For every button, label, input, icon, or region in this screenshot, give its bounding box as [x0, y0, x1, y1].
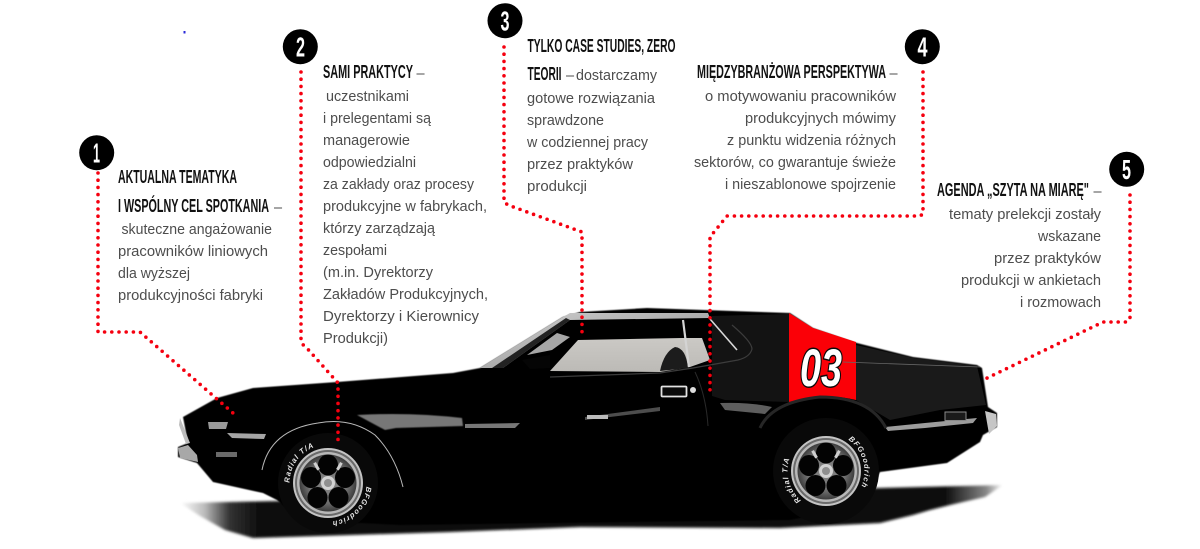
heading 2 [323, 61, 426, 82]
heading 5 [937, 179, 1102, 200]
body 3: produkcji [527, 179, 587, 195]
body 4: z punktu widzenia różnych [727, 133, 896, 149]
heading 1 [118, 166, 283, 216]
B pillar [683, 320, 689, 367]
body 4: i nieszablonowe spojrzenie [725, 177, 896, 193]
body 2: zespołami [323, 243, 387, 259]
text block 4 [694, 61, 898, 193]
body 4: sektorów, co gwarantuje świeże [694, 155, 896, 171]
rear wheel [774, 418, 879, 524]
body 4 [694, 89, 897, 193]
front wheel [278, 433, 378, 526]
body 3: gotowe rozwiązania [527, 91, 656, 107]
heading 2: – [416, 66, 426, 82]
heading 3: TEORII [528, 63, 562, 84]
body 1: pracowników liniowych [118, 244, 268, 260]
body 2: uczestnikami [326, 89, 409, 105]
body 4: produkcyjnych mówimy [745, 111, 897, 127]
body 5 [949, 207, 1102, 311]
heading 3 [528, 35, 676, 84]
rear lights and bumper [945, 411, 997, 434]
trunk sheen [856, 345, 986, 420]
front wheel: Radial T/A [284, 443, 314, 483]
heading 4 [697, 61, 898, 82]
race number 03: 03 [800, 339, 842, 398]
seat [660, 347, 688, 371]
rear quarter chrome [710, 319, 737, 350]
body 2 [323, 89, 488, 347]
rear wheel arch [760, 397, 886, 428]
body 2: i prelegentami są [323, 111, 432, 127]
body 2: managerowie [323, 133, 410, 149]
badge 2 [283, 29, 318, 64]
body 5: wskazane [1037, 229, 1101, 245]
door handle [662, 386, 696, 396]
text block 3 [526, 35, 676, 195]
badge 1: 1 [93, 138, 100, 168]
door seam [695, 372, 708, 426]
text block 1 [118, 166, 283, 304]
vent window [527, 333, 570, 355]
badge 1 [79, 135, 114, 170]
body 4: o motywowaniu pracowników [705, 89, 897, 105]
rear wheel: Radial T/A [782, 458, 801, 504]
side window [550, 338, 710, 372]
dotted connector 4 [710, 72, 923, 395]
badge 5 [1109, 152, 1144, 187]
body 3: w codziennej pracy [526, 135, 649, 151]
body 1: produkcyjności fabryki [118, 288, 263, 304]
heading 4: MIĘDZYBRANŻOWA PERSPEKTYWA [697, 61, 886, 82]
blue speck [184, 31, 186, 34]
heading 4: – [890, 66, 898, 82]
heading 5: – [1094, 184, 1102, 200]
car illustration [177, 307, 1000, 540]
dotted connector 5 [983, 195, 1130, 380]
heading 1: AKTUALNA TEMATYKA [118, 166, 237, 187]
heading 2: SAMI PRAKTYCY [323, 61, 413, 82]
heading 1: I WSPÓLNY CEL SPOTKANIA [118, 195, 269, 216]
body 5: i rozmowach [1020, 295, 1101, 311]
body 2: odpowiedzialni [323, 155, 416, 171]
body 3: sprawdzone [527, 113, 604, 129]
body 3: dostarczamy [576, 68, 658, 84]
body 1: skuteczne angażowanie [122, 222, 272, 238]
heading 3: TYLKO CASE STUDIES, ZERO [528, 35, 676, 56]
badge 2: 2 [296, 32, 305, 62]
badge 4 [905, 29, 940, 64]
pillar inner black [492, 318, 570, 368]
dotted connector 3 [504, 47, 582, 333]
body 2: (m.in. Dyrektorzy [323, 265, 434, 281]
badge 3: 3 [500, 6, 510, 36]
dotted connector 2 [301, 72, 338, 442]
body 2: Dyrektorzy i Kierownicy [323, 309, 480, 325]
dotted connector 1 [98, 173, 233, 413]
body 2: Zakładów Produkcyjnych, [323, 287, 488, 303]
text block 5 [937, 179, 1102, 311]
front wheel arch line [262, 422, 403, 487]
heading 5: AGENDA „SZYTA NA MIARĘ" [937, 179, 1089, 200]
heading 1: – [274, 200, 283, 216]
body 3: – [566, 68, 575, 84]
rear window outline [550, 325, 752, 377]
windshield pillar and roof chrome [480, 313, 710, 368]
text block 2 [323, 61, 488, 347]
body 2: za zakłady oraz procesy [323, 177, 475, 193]
body 2: produkcyjne w fabrykach, [323, 199, 487, 215]
body 2: Produkcji) [323, 331, 388, 347]
body 5: tematy prelekcji zostały [949, 207, 1102, 223]
rear wheel: BFGoodrich [848, 436, 870, 488]
front wheel: BFGoodrich [333, 486, 372, 526]
badge 3 [488, 3, 522, 38]
body highlights [357, 362, 980, 431]
body 1 [118, 222, 272, 304]
body 5: przez praktyków [994, 251, 1102, 267]
front lights and chrome [178, 418, 266, 462]
body 3: przez praktyków [527, 157, 634, 173]
car body silhouette [178, 308, 997, 525]
badge 5: 5 [1122, 154, 1131, 185]
ground shadow [180, 485, 1003, 538]
roof panel sheen [712, 314, 789, 402]
badge 4: 4 [918, 32, 928, 62]
body 2: którzy zarządzają [323, 221, 436, 237]
body 3 [526, 68, 658, 195]
body 1: dla wyższej [118, 266, 190, 282]
mirror [522, 355, 550, 369]
red racing panel [789, 313, 856, 402]
body 5: produkcji w ankietach [961, 273, 1101, 289]
